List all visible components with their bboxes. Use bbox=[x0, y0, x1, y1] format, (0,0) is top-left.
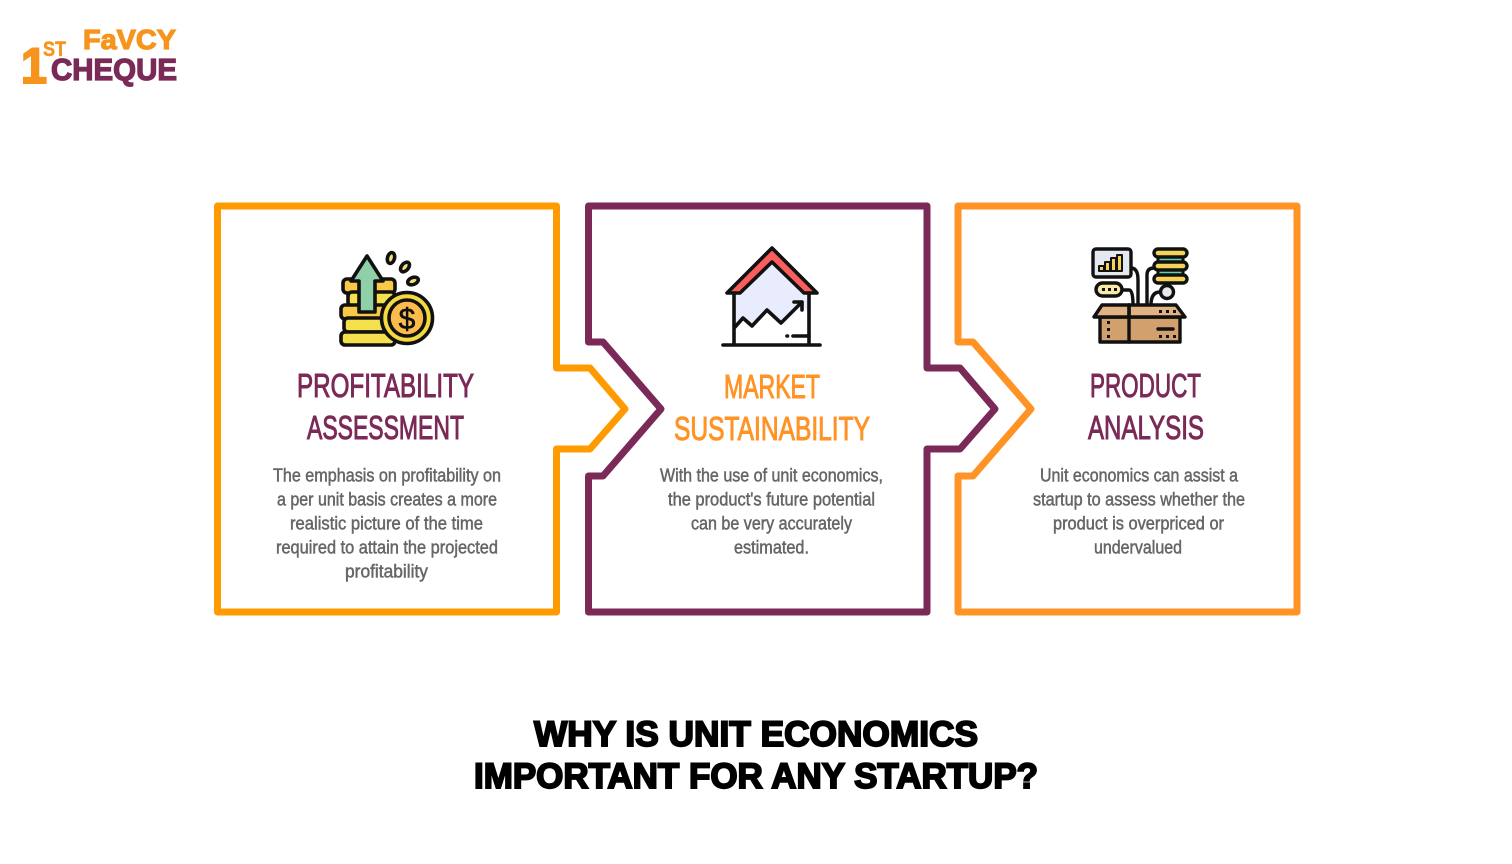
logo: CHEQUE bbox=[51, 52, 177, 87]
text: product description bbox=[1033, 464, 1245, 558]
text: profitability description bbox=[273, 464, 501, 582]
icon: product box with data bbox=[1093, 249, 1187, 342]
text: product description: product is overpriced or bbox=[1053, 512, 1224, 534]
icon: house with growth chart bbox=[723, 248, 820, 345]
heading: profitability assessment: PROFITABILITY bbox=[297, 367, 474, 404]
heading: profitability assessment: ASSESSMENT bbox=[307, 409, 464, 446]
heading: market sustainability: MARKET bbox=[724, 368, 820, 405]
text: product description: startup to assess whether the bbox=[1033, 488, 1245, 510]
text: profitability description: profitability bbox=[345, 560, 429, 582]
text: profitability description: required to attain the projected bbox=[276, 536, 498, 558]
heading: product analysis bbox=[1088, 367, 1204, 446]
text: market description bbox=[660, 464, 883, 558]
logo: ST bbox=[43, 38, 66, 61]
icon: coins with up arrow bbox=[341, 252, 432, 345]
heading: profitability assessment bbox=[297, 367, 474, 446]
text: profitability description: a per unit basis creates a more bbox=[277, 488, 497, 510]
logo bbox=[21, 24, 177, 94]
panel 3 outline with notch bbox=[958, 206, 1297, 612]
text: market description: estimated. bbox=[734, 536, 809, 558]
text: market description: With the use of unit economics, bbox=[660, 464, 883, 486]
text: product description: Unit economics can assist a bbox=[1040, 464, 1239, 486]
panel: product analysis bbox=[958, 206, 1297, 612]
panel 2 outline with notch and arrow bbox=[588, 206, 995, 612]
heading: product analysis: PRODUCT bbox=[1090, 367, 1201, 404]
title: WHY IS UNIT ECONOMICS bbox=[534, 715, 978, 754]
logo: 1 bbox=[21, 38, 47, 94]
text: profitability description: The emphasis on profitability on bbox=[273, 464, 501, 486]
logo: FaVCY bbox=[83, 24, 176, 55]
panel: market sustainability bbox=[588, 206, 995, 612]
heading: market sustainability bbox=[674, 368, 870, 447]
text: market description: can be very accurately bbox=[691, 512, 853, 534]
panel 1 outline with arrow bbox=[218, 206, 625, 612]
title bbox=[474, 715, 1038, 796]
text: market description: the product's future potential bbox=[668, 488, 875, 510]
icon glyph: dollar sign: $ bbox=[399, 303, 416, 336]
text: product description: undervalued bbox=[1094, 536, 1182, 558]
text: profitability description: realistic picture of the time bbox=[290, 512, 483, 534]
panel: profitability assessment bbox=[218, 206, 625, 612]
title: IMPORTANT FOR ANY STARTUP? bbox=[474, 757, 1038, 796]
heading: product analysis: ANALYSIS bbox=[1088, 409, 1204, 446]
icon details: box dots bbox=[1102, 288, 1176, 338]
heading: market sustainability: SUSTAINABILITY bbox=[674, 410, 870, 447]
